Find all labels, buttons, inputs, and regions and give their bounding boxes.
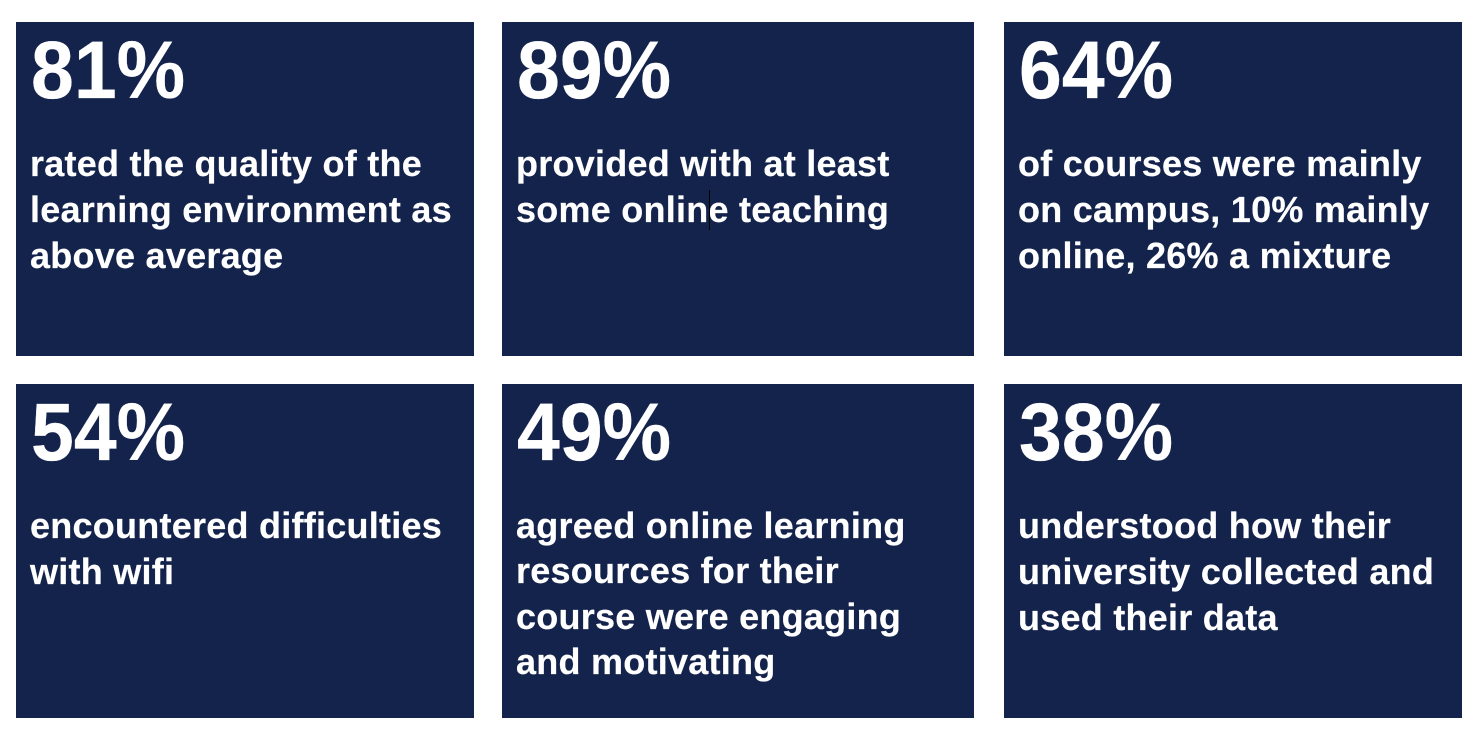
text: 89% description: [516, 143, 890, 230]
statistic: 81%: 81%: [31, 25, 185, 116]
statistic: 89%: 89%: [517, 25, 671, 116]
text: 64% description: [1018, 143, 1430, 276]
text: 81% description: learning environment as: [30, 189, 452, 230]
text: 38% description: [1018, 505, 1434, 638]
panel: 49% engaging resources: [502, 384, 974, 718]
text: 49% description: course were engaging: [516, 596, 901, 637]
statistic: 64%: 64%: [1019, 25, 1173, 116]
text: 38% description: university collected and: [1018, 551, 1434, 592]
text cursor: [709, 190, 710, 230]
text: 54% description: with wifi: [30, 551, 174, 592]
panel: 81% quality of learning environment: [16, 22, 474, 356]
panel: 89% online teaching: [502, 22, 974, 356]
text: 49% description: and motivating: [516, 641, 776, 682]
text: 81% description: rated the quality of the: [30, 143, 422, 184]
text: 64% description: on campus, 10% mainly: [1018, 189, 1429, 230]
statistic: 54%: 54%: [31, 387, 185, 478]
text: 54% description: encountered difficulties: [30, 505, 442, 546]
text: 89% description: provided with at least: [516, 143, 890, 184]
text: 38% description: used their data: [1018, 597, 1278, 638]
text: 64% description: of courses were mainly: [1018, 143, 1422, 184]
text: 89% description: some online teaching: [516, 189, 889, 230]
text: 81% description: above average: [30, 235, 283, 276]
text: 49% description: agreed online learning: [516, 505, 906, 546]
statistic: 38%: 38%: [1019, 387, 1173, 478]
panel: 38% data understanding: [1004, 384, 1462, 718]
panel: 54% wifi difficulties: [16, 384, 474, 718]
statistic: 49%: 49%: [517, 387, 671, 478]
text: 81% description: [30, 143, 452, 276]
panel: 64% course delivery: [1004, 22, 1462, 356]
text: 64% description: online, 26% a mixture: [1018, 235, 1391, 276]
text: 49% description: resources for their: [516, 550, 839, 591]
text: 38% description: understood how their: [1018, 505, 1391, 546]
text: 54% description: [30, 505, 442, 592]
text: 49% description: [516, 505, 906, 682]
